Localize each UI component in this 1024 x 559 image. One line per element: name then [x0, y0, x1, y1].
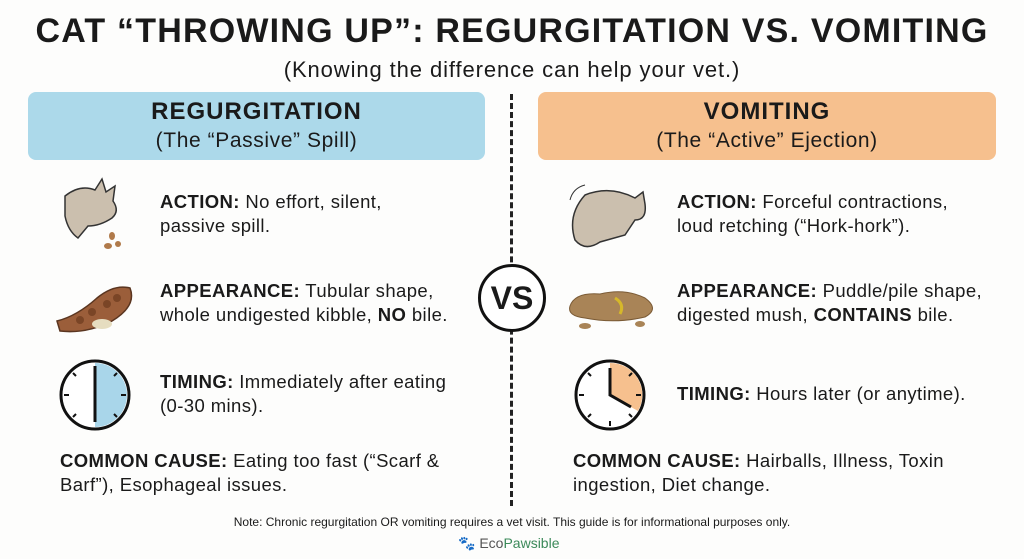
text: regurgitation timing: TIMING: Immediately after eating — [160, 371, 446, 392]
text: regurgitation cause — [60, 450, 440, 495]
icon: cat vomiting — [570, 184, 646, 248]
text: vomiting action: loud retching (“Hork-hork”). — [677, 215, 910, 236]
logo: 🐾 EcoPawsible — [458, 535, 559, 551]
text: vomiting cause: ingestion, Diet change. — [573, 474, 770, 495]
icon: cat passive — [64, 177, 121, 249]
text: vomiting appearance — [677, 280, 982, 325]
panel header: vomiting: VOMITING — [704, 98, 830, 125]
text: regurgitation cause: Barf”), Esophageal issues. — [60, 474, 287, 495]
text: regurgitation action: ACTION: No effort, silent, — [160, 191, 382, 212]
text: vomiting timing: TIMING: Hours later (or anytime). — [677, 383, 966, 404]
icon: puddle — [569, 291, 653, 329]
text: regurgitation action — [160, 191, 382, 236]
panel header: regurgitation: (The “Passive” Spill) — [156, 129, 357, 152]
text: regurgitation cause: COMMON CAUSE: Eating too fast (“Scarf & — [60, 450, 440, 471]
text: regurgitation appearance: whole undigested kibble, NO bile. — [160, 304, 448, 325]
VS circle: VS — [491, 280, 533, 316]
text: vomiting cause: COMMON CAUSE: Hairballs, Illness, Toxin — [573, 450, 944, 471]
title: CAT “THROWING UP”: REGURGITATION VS. VOMITING — [35, 12, 989, 50]
icon: clock fast — [60, 360, 130, 430]
panel header: regurgitation: REGURGITATION — [151, 98, 362, 125]
text: regurgitation timing: (0-30 mins). — [160, 395, 264, 416]
text: vomiting appearance: digested mush, CONTAINS bile. — [677, 304, 954, 325]
text: regurgitation appearance — [160, 280, 448, 325]
text: regurgitation timing — [160, 371, 446, 416]
text: vomiting appearance: APPEARANCE: Puddle/pile shape, — [677, 280, 982, 301]
text: regurgitation action: passive spill. — [160, 215, 270, 236]
text: vomiting action — [677, 191, 948, 236]
VS circle — [478, 264, 546, 332]
divider — [510, 94, 513, 506]
panel header: vomiting — [538, 92, 996, 160]
footnote: Note: Chronic regurgitation OR vomiting requires a vet visit. This guide is for informational purposes only. — [234, 515, 790, 529]
panel header: regurgitation — [28, 92, 485, 160]
panel header: vomiting: (The “Active” Ejection) — [656, 129, 878, 152]
text: vomiting action: ACTION: Forceful contractions, — [677, 191, 948, 212]
icon: tubular regurgitate — [56, 286, 132, 332]
subtitle: (Knowing the difference can help your vet.) — [284, 57, 740, 82]
text: vomiting cause — [573, 450, 944, 495]
text: regurgitation appearance: APPEARANCE: Tubular shape, — [160, 280, 434, 301]
icon: clock later — [574, 360, 646, 430]
